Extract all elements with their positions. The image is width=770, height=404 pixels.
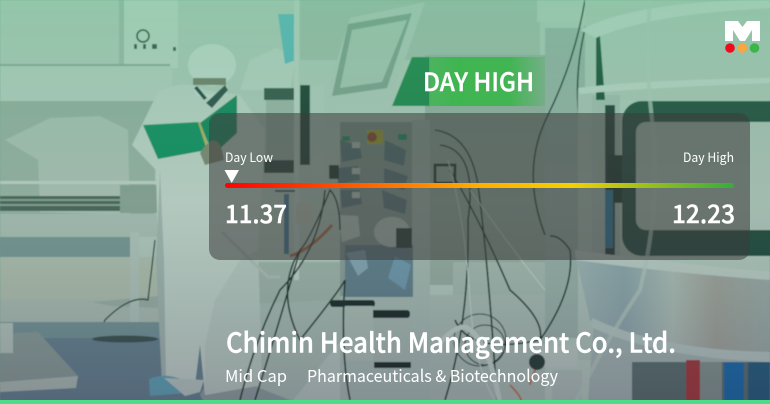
day high label: Day High	[683, 147, 734, 166]
lab bench below stand	[200, 262, 346, 404]
range gradient bar	[225, 183, 734, 188]
sector label: Pharmaceuticals & Biotechnology	[307, 363, 558, 387]
orange tubing and fittings	[510, 345, 582, 404]
bottom accent bar	[0, 400, 770, 404]
price range panel	[209, 113, 750, 260]
logo	[725, 21, 760, 53]
cabinet back section	[392, 0, 600, 404]
market cap label: Mid Cap	[225, 363, 287, 387]
cables	[240, 0, 590, 400]
scientist in white suit	[132, 44, 265, 396]
clear hose	[575, 0, 655, 404]
green folder	[143, 95, 237, 165]
right support column	[578, 0, 770, 360]
scale platform	[0, 323, 78, 392]
day high tag	[423, 57, 545, 106]
current price marker	[224, 170, 239, 183]
day high value: 12.23	[672, 195, 735, 231]
steel drum	[575, 250, 770, 404]
day low label: Day Low	[225, 147, 274, 166]
monitor	[323, 2, 425, 105]
bioreactor glass stand	[222, 0, 332, 280]
company name: Chimin Health Management Co., Ltd.	[226, 322, 676, 360]
left safety cabinet	[0, 0, 240, 404]
day high tag: DAY HIGH	[423, 63, 534, 99]
pump control panel	[329, 120, 430, 404]
vessel window	[622, 101, 770, 256]
day low value: 11.37	[225, 195, 287, 231]
